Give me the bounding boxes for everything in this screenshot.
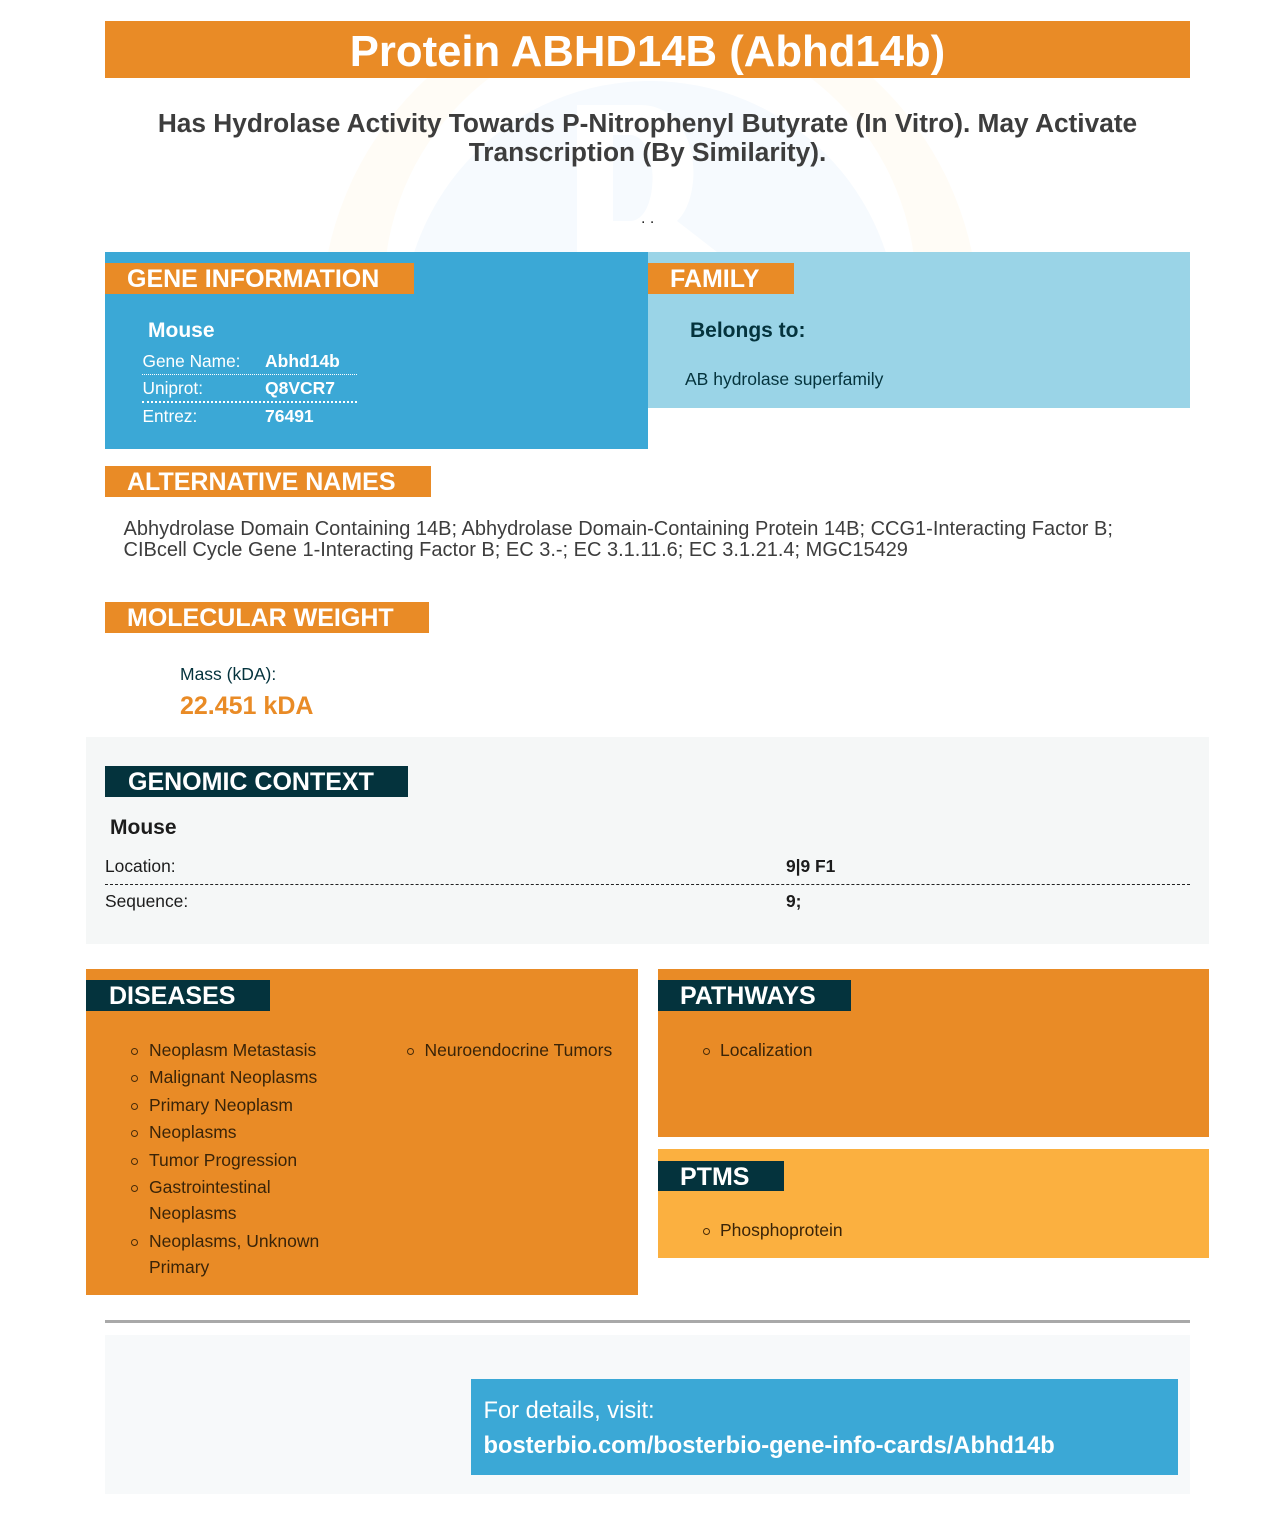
gene name value: Abhd14b [265, 351, 340, 371]
callout: details link [471, 1379, 1178, 1475]
heading: ptms: PTMS [680, 1163, 749, 1191]
panel: family [648, 252, 1190, 408]
panel: footer [105, 1335, 1190, 1494]
disease list column 1: Neoplasms, Unknown [149, 1231, 319, 1251]
subtitle: Has Hydrolase Activity Towards P-Nitrophenyl Butyrate (In Vitro). May Activate [158, 108, 1137, 138]
heading: family [648, 263, 794, 294]
uniprot label: Uniprot: [142, 378, 203, 398]
panel: pathways [658, 969, 1209, 1137]
disease list column 1: Primary Neoplasm [149, 1095, 293, 1115]
heading: family: FAMILY [670, 265, 759, 293]
panel: ptms [658, 1149, 1209, 1258]
sequence value: 9; [786, 891, 801, 911]
location value: 9|9 F1 [786, 856, 835, 876]
subtitle: Transcription (By Similarity). [469, 137, 826, 167]
gene name label: Gene Name: [142, 351, 240, 371]
species label: Mouse [110, 816, 177, 839]
heading: genomic context: GENOMIC CONTEXT [128, 768, 374, 796]
location label: Location: [105, 856, 176, 876]
disease list column 1: Tumor Progression [149, 1150, 297, 1170]
watermark logo [328, 78, 972, 252]
disease list column 1: Malignant Neoplasms [149, 1067, 317, 1087]
subtitle [158, 108, 1137, 167]
heading: diseases: DISEASES [109, 982, 235, 1010]
belongs to label: Belongs to: [690, 319, 806, 342]
heading: ptms [658, 1161, 784, 1191]
heading: pathways [658, 980, 851, 1011]
title banner: Protein ABHD14B (Abhd14b) [350, 27, 945, 76]
alternative names text [124, 518, 1113, 560]
uniprot value: Q8VCR7 [265, 378, 335, 398]
mass value: 22.451 kDA [180, 692, 313, 720]
heading: diseases [86, 980, 270, 1011]
heading: alternative names: ALTERNATIVE NAMES [127, 468, 396, 496]
pathway item: Localization [720, 1040, 812, 1060]
dots: . . [641, 210, 654, 227]
url: bosterbio.com/bosterbio-gene-info-cards/Abhd14b [484, 1433, 1055, 1459]
alternative names text: CIBcell Cycle Gene 1-Interacting Factor B; EC 3.-; EC 3.1.11.6; EC 3.1.21.4; MGC15429 [124, 538, 908, 560]
disease list column 1: Neoplasm Metastasis [149, 1040, 316, 1060]
species label: Mouse [148, 319, 215, 342]
alternative names text: Abhydrolase Domain Containing 14B; Abhydrolase Domain-Containing Protein 14B; CCG1-Interacting Factor B; [124, 518, 1113, 540]
panel: genomic context [86, 737, 1209, 944]
entrez value: 76491 [265, 406, 314, 426]
heading: molecular weight: MOLECULAR WEIGHT [127, 604, 394, 632]
heading: pathways: PATHWAYS [680, 982, 816, 1010]
family value: AB hydrolase superfamily [685, 369, 883, 389]
disease list column 1 [131, 1040, 319, 1277]
disease list column 1: Neoplasms [149, 1122, 237, 1142]
panel: diseases [86, 969, 638, 1295]
panel: gene information [105, 252, 648, 449]
disease list column 2: Neuroendocrine Tumors [424, 1040, 612, 1060]
ptm item: Phosphoprotein [720, 1220, 843, 1240]
heading: gene information: GENE INFORMATION [127, 265, 379, 293]
title banner [105, 21, 1190, 78]
disease list column 1: Primary [149, 1257, 209, 1277]
entrez label: Entrez: [142, 406, 197, 426]
sequence label: Sequence: [105, 891, 188, 911]
mass label: Mass (kDA): [180, 664, 276, 684]
visit label: For details, visit: [484, 1398, 655, 1424]
disease list column 1: Neoplasms [149, 1203, 237, 1223]
disease list column 1: Gastrointestinal [149, 1177, 271, 1197]
